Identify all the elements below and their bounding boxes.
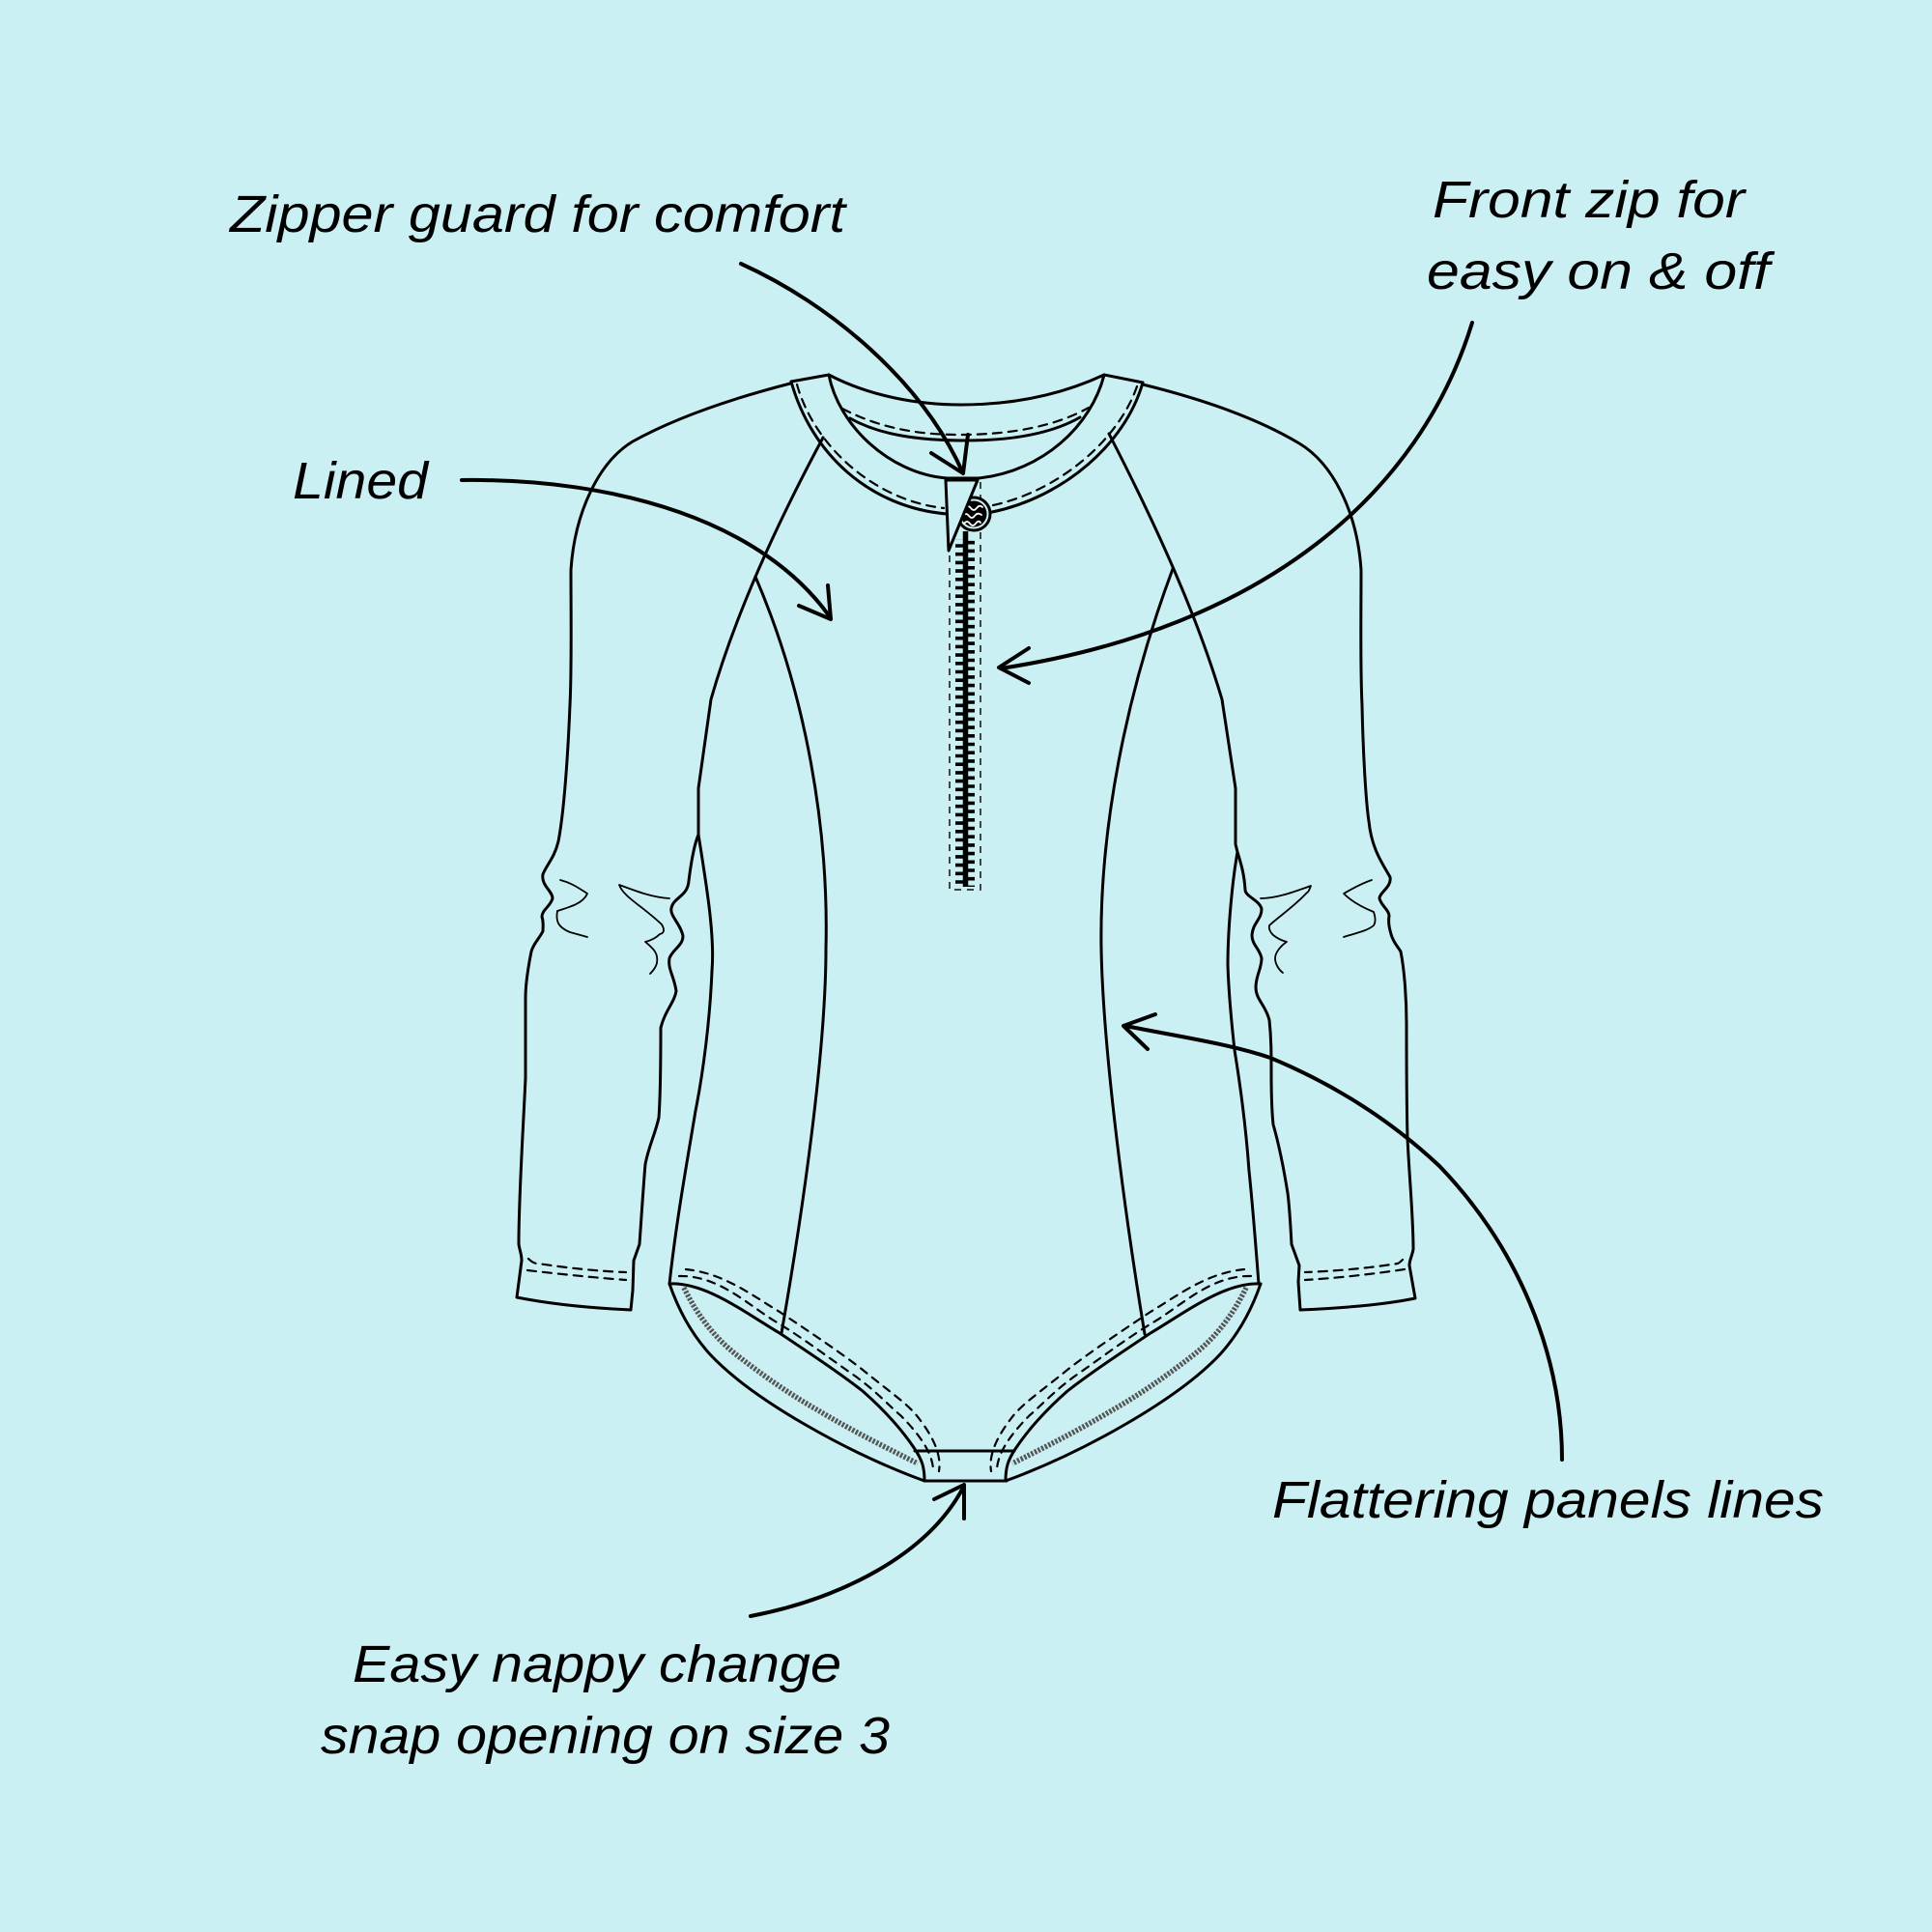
left leg opening bbox=[669, 1269, 940, 1481]
label: nappy change: snap opening on size 3 bbox=[321, 1707, 890, 1765]
arrow: front zip bbox=[999, 323, 1472, 683]
label: front zip bbox=[1427, 171, 1776, 300]
zipper guard bbox=[946, 480, 978, 551]
right sleeve and side seams bbox=[1101, 384, 1415, 1334]
left sleeve and side seams bbox=[517, 384, 826, 1333]
label: zipper guard: Zipper guard for comfort bbox=[228, 185, 847, 243]
arrow: nappy change bbox=[751, 1485, 964, 1616]
collar bbox=[791, 375, 1143, 514]
arrow: lined bbox=[462, 480, 831, 619]
arrow: flattering panel lines bbox=[1123, 1014, 1562, 1460]
crotch gusset bbox=[915, 1451, 1014, 1481]
label: front zip: easy on & off bbox=[1427, 242, 1776, 300]
label: flattering panels lines: Flattering panels lines bbox=[1272, 1471, 1824, 1529]
right leg opening bbox=[990, 1269, 1261, 1481]
garment: long sleeve swimsuit bbox=[517, 375, 1415, 1481]
label: nappy change: Easy nappy change bbox=[353, 1635, 841, 1693]
label: lined: Lined bbox=[293, 452, 430, 510]
zipper bbox=[950, 480, 980, 890]
zipper pull bbox=[957, 497, 990, 530]
arrow: zipper guard bbox=[741, 264, 968, 473]
label: front zip: Front zip for bbox=[1433, 171, 1747, 229]
label: nappy change bbox=[321, 1635, 890, 1765]
